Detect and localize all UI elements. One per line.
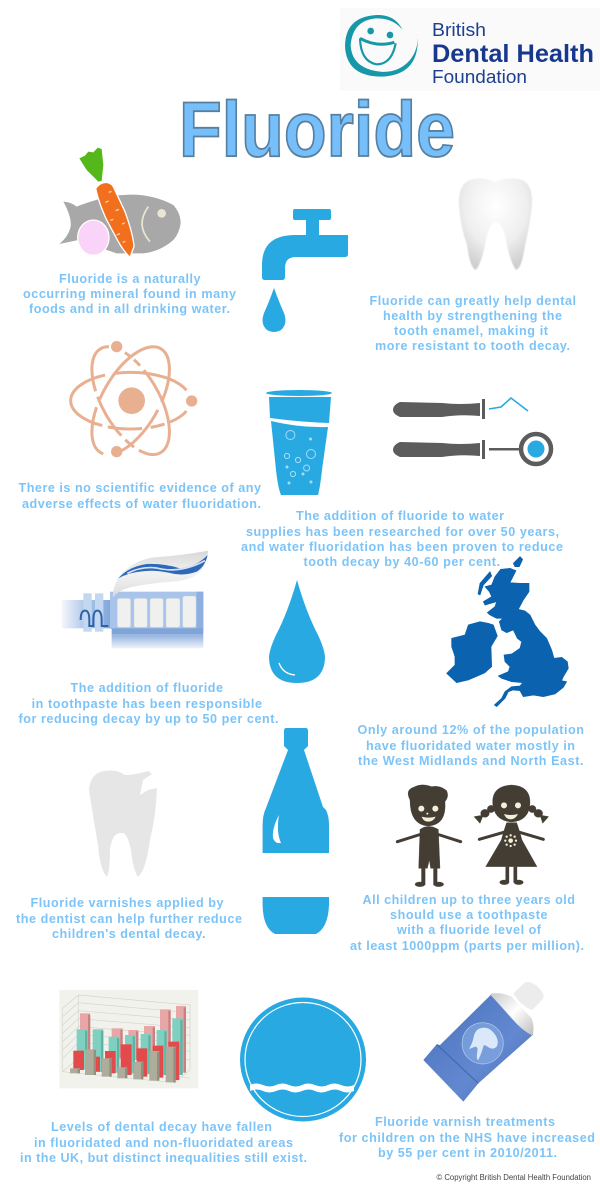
text: strengthening enamel: more resistant to tooth decay. bbox=[375, 339, 570, 353]
text: researched for over 50 years: The addition of fluoride to water bbox=[296, 509, 504, 523]
chart: 3D bar chart bbox=[59, 990, 198, 1088]
text: strengthening enamel: health by strengthening the bbox=[383, 309, 562, 323]
text: fluoride varnishes: Fluoride varnishes applied by bbox=[30, 896, 224, 910]
text: toothpaste reduces decay: in toothpaste has been responsible bbox=[32, 697, 262, 711]
text: children toothpaste: at least 1000ppm (parts per million). bbox=[350, 939, 584, 953]
icon: map of UK and Ireland bbox=[447, 557, 568, 707]
text: researched for over 50 years: supplies has been researched for over 50 years, bbox=[246, 525, 559, 539]
icon: healthy tooth bbox=[459, 178, 532, 270]
text: strengthening enamel: Fluoride can greatly help dental bbox=[370, 294, 576, 308]
icon: water bottle bbox=[263, 728, 329, 934]
text: 12% of the population: Only around 12% of the population bbox=[358, 723, 584, 737]
icon: varnish tube bbox=[423, 982, 544, 1102]
text: 12% of the population bbox=[358, 723, 584, 768]
text: decay levels fallen: in fluoridated and non-fluoridated areas bbox=[34, 1136, 293, 1150]
icon: glass of water bbox=[266, 390, 332, 495]
logo: British Dental Health Foundation: Foundation bbox=[432, 67, 527, 87]
text: strengthening enamel bbox=[370, 294, 576, 353]
text: naturally occurring: Fluoride is a naturally bbox=[59, 272, 200, 286]
text: decay levels fallen bbox=[20, 1120, 307, 1165]
text: 12% of the population: have fluoridated water mostly in bbox=[366, 739, 575, 753]
text: children toothpaste: All children up to three years old bbox=[362, 893, 575, 907]
text: decay levels fallen: Levels of dental decay have fallen bbox=[51, 1120, 272, 1134]
text: researched for over 50 years: and water fluoridation has been proven to reduce bbox=[241, 540, 563, 554]
icon: toothbrush with paste bbox=[62, 551, 208, 648]
text: no adverse effects bbox=[18, 481, 261, 511]
text: fluoride varnishes: children's dental decay. bbox=[52, 927, 206, 941]
text: toothpaste reduces decay: The addition of fluoride bbox=[70, 681, 223, 695]
icon: decayed tooth bbox=[89, 771, 157, 877]
text: children toothpaste: should use a toothpaste bbox=[390, 908, 548, 922]
text: 12% of the population: the West Midlands and North East. bbox=[358, 754, 584, 768]
text: naturally occurring: foods and in all drinking water. bbox=[29, 302, 230, 316]
text: researched for over 50 years bbox=[241, 509, 563, 569]
text: no adverse effects: adverse effects of water fluoridation. bbox=[22, 497, 261, 511]
icon: large water drop bbox=[269, 580, 325, 683]
text: strengthening enamel: tooth enamel, making it bbox=[394, 324, 549, 338]
text: researched for over 50 years: tooth decay by 40-60 per cent. bbox=[304, 555, 500, 569]
text: children toothpaste: with a fluoride level of bbox=[396, 923, 542, 937]
text: children toothpaste bbox=[350, 893, 584, 953]
icon: water circle bbox=[240, 998, 366, 1122]
text: toothpaste reduces decay bbox=[18, 681, 278, 726]
text: NHS varnish treatments: for children on the NHS have increased bbox=[339, 1131, 595, 1145]
text: no adverse effects: There is no scientific evidence of any bbox=[18, 481, 261, 495]
text: toothpaste reduces decay: for reducing decay by up to 50 per cent. bbox=[18, 712, 278, 726]
text: fluoride varnishes: the dentist can help further reduce bbox=[16, 912, 242, 926]
icon: fish, carrot and egg bbox=[59, 148, 181, 257]
text: NHS varnish treatments: Fluoride varnish treatments bbox=[375, 1115, 555, 1129]
text: decay levels fallen: in the UK, but distinct inequalities still exist. bbox=[20, 1151, 307, 1165]
icon: tap with drop bbox=[262, 209, 348, 332]
title: Fluoride bbox=[179, 85, 455, 173]
icon: atom bbox=[71, 335, 197, 467]
copyright: © Copyright British Dental Health Foundation bbox=[436, 1173, 591, 1182]
logo: British Dental Health Foundation: British bbox=[432, 20, 486, 40]
logo: British Dental Health Foundation bbox=[340, 8, 600, 91]
text: NHS varnish treatments: by 55 per cent in 2010/2011. bbox=[378, 1146, 557, 1160]
text: naturally occurring bbox=[23, 272, 236, 316]
icon: dental tools bbox=[393, 398, 551, 464]
logo: British Dental Health Foundation: Dental Health bbox=[432, 40, 594, 68]
text: fluoride varnishes bbox=[16, 896, 242, 941]
text: NHS varnish treatments bbox=[339, 1115, 595, 1160]
icon: two children bbox=[397, 785, 549, 887]
text: naturally occurring: occurring mineral found in many bbox=[23, 287, 236, 301]
